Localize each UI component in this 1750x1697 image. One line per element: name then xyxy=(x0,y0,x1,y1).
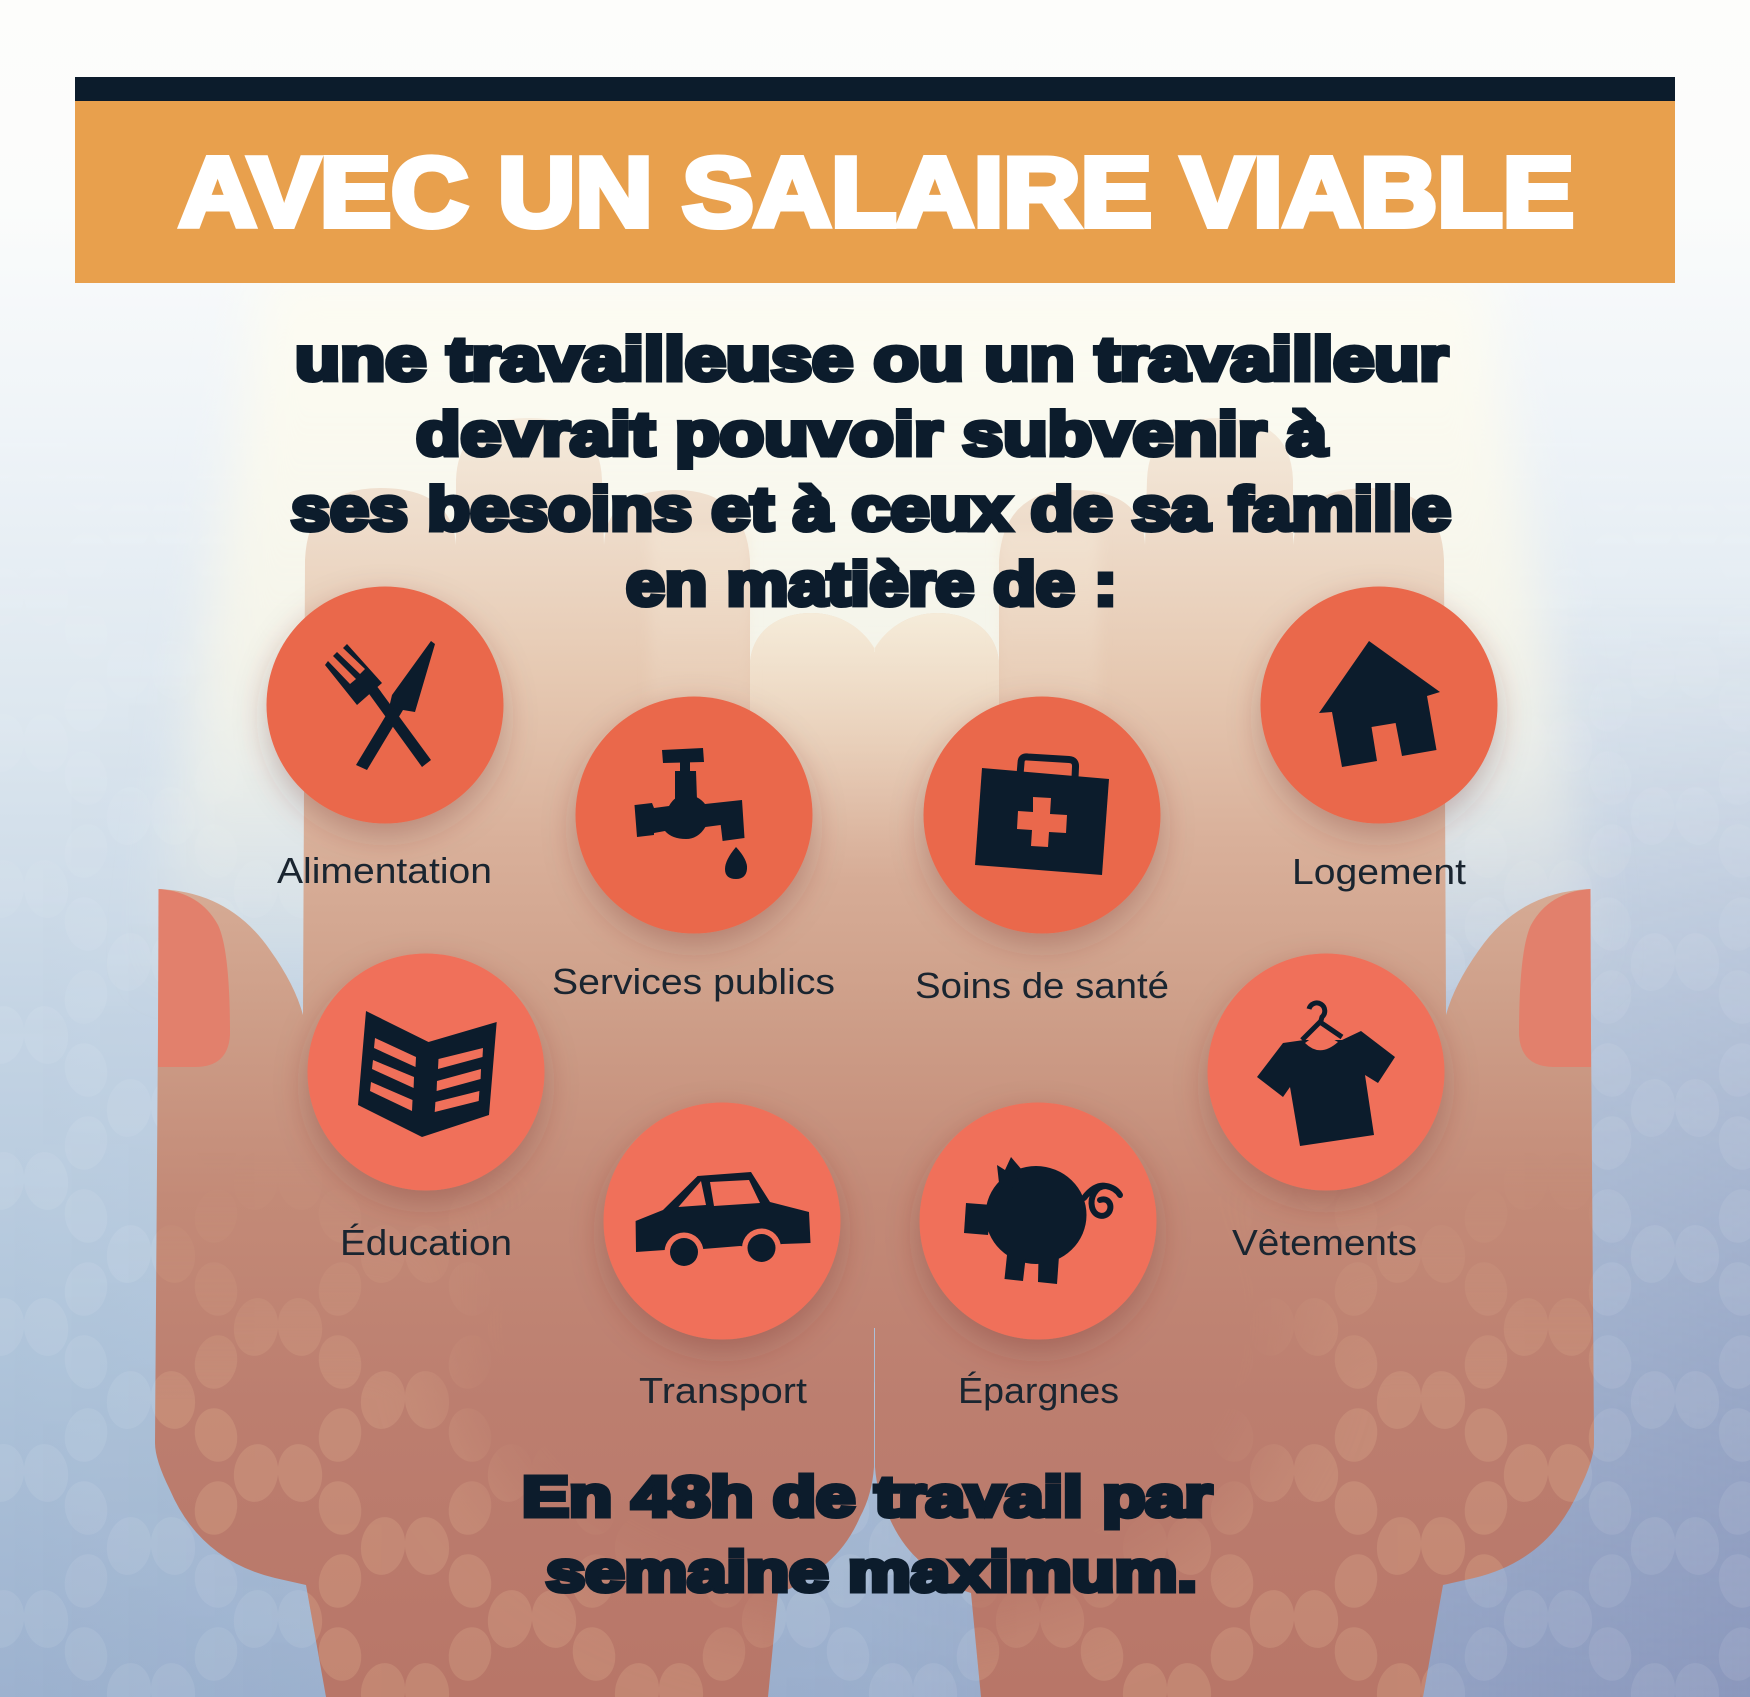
intro text xyxy=(291,325,1451,618)
item: Épargnes xyxy=(920,1102,1156,1411)
right hand xyxy=(875,418,1594,1697)
icon: water tap xyxy=(634,748,747,879)
background heart pattern xyxy=(1424,1427,1750,1697)
right thumb nail xyxy=(1519,889,1591,1067)
icon: house xyxy=(1319,641,1440,767)
item: Éducation xyxy=(308,954,544,1263)
closing text xyxy=(522,1465,1212,1604)
label: Vêtements xyxy=(1232,1222,1417,1263)
item: Vêtements xyxy=(1208,954,1444,1263)
intro text: en matière de : xyxy=(626,550,1117,618)
title text: AVEC UN SALAIRE VIABLE xyxy=(179,137,1574,247)
label: Épargnes xyxy=(958,1370,1119,1411)
left hand xyxy=(155,418,874,1697)
join between the hands xyxy=(871,652,878,1328)
intro text: devrait pouvoir subvenir à xyxy=(416,400,1328,468)
icon: open book xyxy=(358,1011,497,1137)
item: Alimentation xyxy=(266,586,504,891)
intro text: ses besoins et à ceux de sa famille xyxy=(291,475,1451,543)
item: Logement xyxy=(1260,586,1498,892)
closing text: semaine maximum. xyxy=(546,1540,1197,1604)
top dark bar xyxy=(75,77,1675,101)
label: Logement xyxy=(1292,851,1466,892)
closing text: En 48h de travail par xyxy=(522,1465,1212,1529)
icon: t-shirt on hanger xyxy=(1257,1003,1395,1146)
label: Transport xyxy=(639,1370,807,1411)
icon: medical kit xyxy=(975,757,1109,875)
illustration: two cupped hands xyxy=(155,418,1594,1697)
central cream fingertips xyxy=(750,613,999,880)
title banner xyxy=(75,101,1675,283)
label: Soins de santé xyxy=(915,965,1169,1006)
icon: piggy bank xyxy=(964,1157,1120,1284)
item: Soins de santé xyxy=(915,696,1169,1006)
item: Transport xyxy=(604,1102,840,1411)
item: Services publics xyxy=(552,696,835,1002)
icon: car xyxy=(636,1172,810,1272)
label: Services publics xyxy=(552,961,835,1002)
skin heart pattern xyxy=(156,1322,1594,1697)
intro text: une travailleuse ou un travailleur xyxy=(295,325,1448,393)
label: Alimentation xyxy=(277,850,492,891)
light beam behind the hands xyxy=(150,270,1600,980)
lighter finger strips xyxy=(650,530,1099,780)
icon: fork and knife xyxy=(325,641,435,770)
label: Éducation xyxy=(340,1222,512,1263)
left thumb nail xyxy=(158,889,230,1067)
